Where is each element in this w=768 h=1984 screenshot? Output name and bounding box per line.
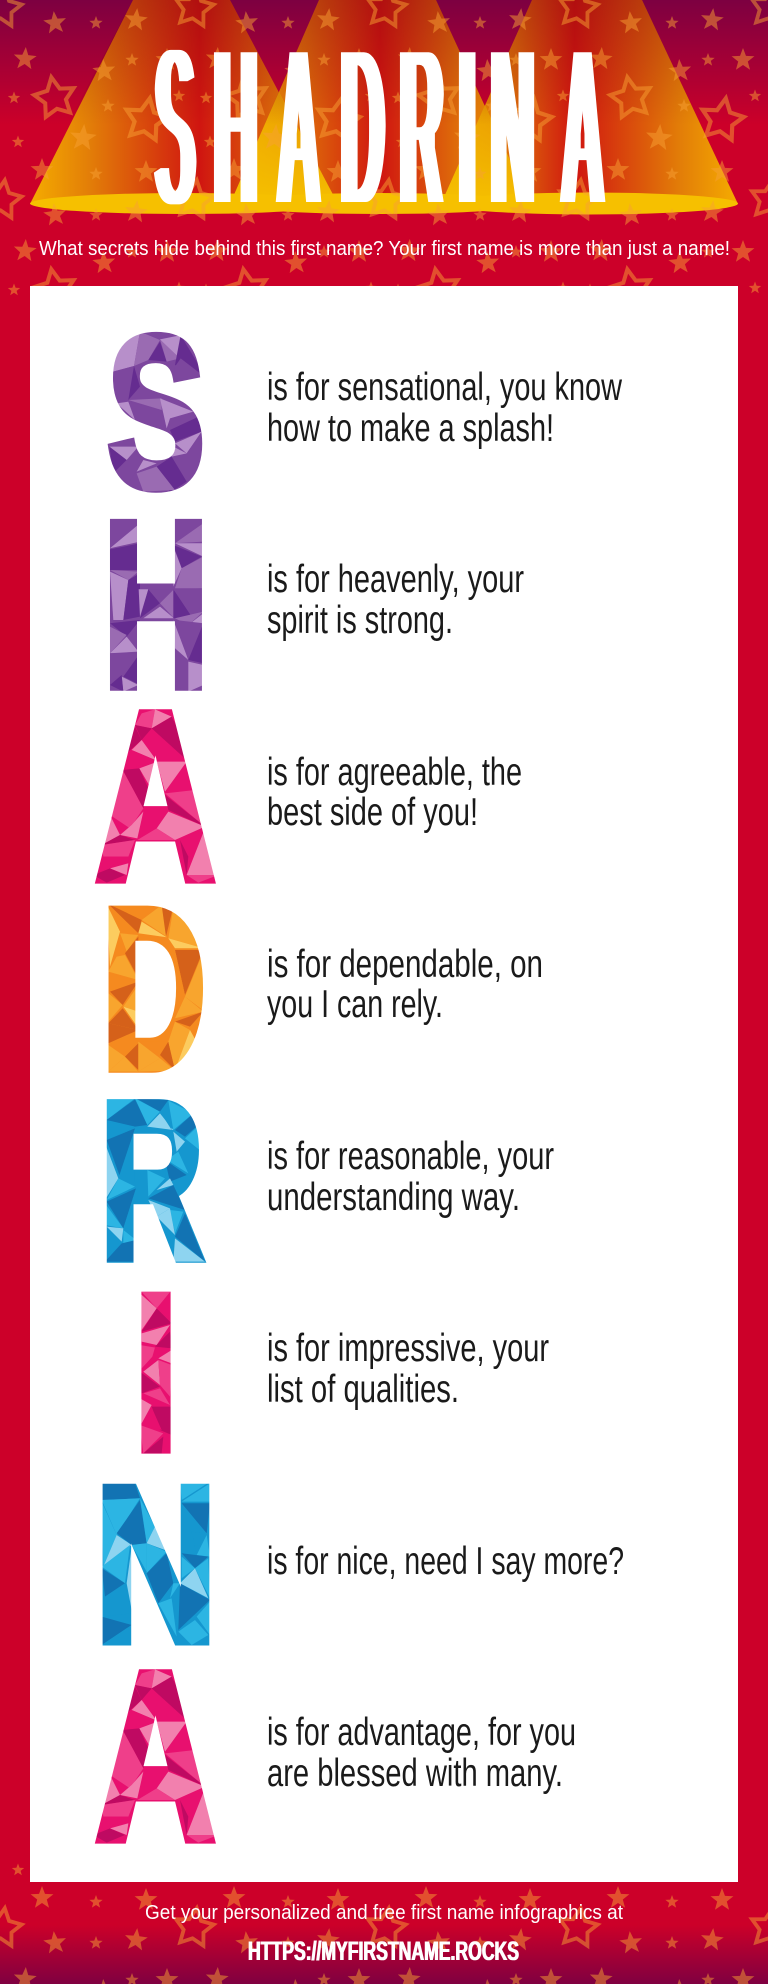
title: SHADRINA <box>155 0 604 260</box>
row: S <box>108 332 622 493</box>
star pattern: top <box>0 0 768 300</box>
text: H: spirit is strong. <box>267 599 453 642</box>
row: A <box>94 709 521 884</box>
panel: letters <box>30 286 738 1882</box>
row: D <box>108 906 541 1073</box>
bottom shade <box>0 1925 768 1984</box>
text: D: you I can rely. <box>267 983 443 1026</box>
text: A: is for agreeable, the <box>267 751 522 794</box>
text: R <box>267 1135 554 1219</box>
subtitle: What secrets hide behind this first name? Your first name is more than just a name! <box>39 238 730 260</box>
text: I <box>267 1327 549 1411</box>
text: A <box>267 751 522 834</box>
row: I <box>141 1292 549 1454</box>
text: I: list of qualities. <box>267 1368 459 1411</box>
icon: letter I <box>141 1292 171 1454</box>
text: I: is for impressive, your <box>267 1327 549 1370</box>
top shade <box>0 0 768 125</box>
text: H: is for heavenly, your <box>267 558 524 601</box>
row: R <box>106 1099 554 1263</box>
text: A: best side of you! <box>267 791 478 834</box>
icon: letter A <box>94 1669 216 1844</box>
footer url: HTTPS://MYFIRSTNAME.ROCKS <box>248 1936 519 1966</box>
text: S <box>267 366 623 450</box>
icon: letter N <box>102 1484 210 1646</box>
text: H <box>267 558 524 642</box>
row: N <box>102 1484 623 1646</box>
icon: letter D <box>108 906 204 1073</box>
icon: letter R <box>106 1099 206 1263</box>
icon: letter S <box>108 332 202 493</box>
text: S: how to make a splash! <box>267 407 554 450</box>
text: A (second): is for advantage, for you <box>267 1711 576 1754</box>
icon: letter A <box>94 709 216 884</box>
text: N: is for nice, need I say more? <box>267 1540 624 1583</box>
text: D <box>267 943 543 1026</box>
text: A (second): are blessed with many. <box>267 1752 563 1795</box>
text: R: understanding way. <box>267 1176 520 1219</box>
footer text: Get your personalized and free first name infographics at <box>145 1902 623 1924</box>
text: D: is for dependable, on <box>267 943 543 986</box>
text: S: is for sensational, you know <box>267 366 623 409</box>
stage spotlights <box>30 0 738 214</box>
row: H <box>110 518 524 691</box>
text: R: is for reasonable, your <box>267 1135 554 1178</box>
row: A (second) <box>94 1669 574 1844</box>
star pattern: bottom <box>0 1860 768 1984</box>
icon: letter H <box>110 518 202 691</box>
text: A (second) <box>267 1711 576 1795</box>
